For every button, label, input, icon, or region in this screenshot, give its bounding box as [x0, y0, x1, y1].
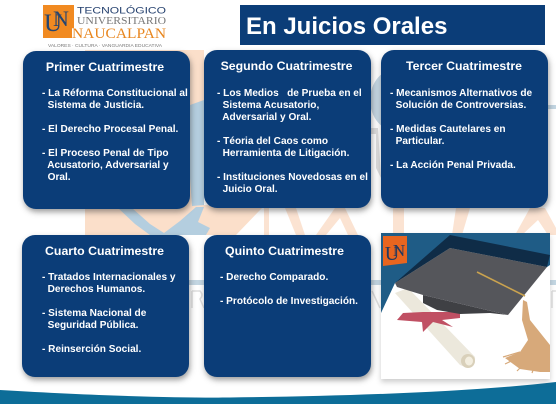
graduation cap and diploma image [381, 233, 550, 379]
icon: diploma scroll [395, 288, 475, 368]
panel: Segundo Cuatrimestre: Sistema Acusatorio, [223, 100, 319, 111]
panel: Cuarto Cuatrimestre: Seguridad Pública. [48, 320, 138, 331]
panel: Cuarto Cuatrimestre: - Tratados Internacionales y [42, 272, 176, 283]
panel: Quinto Cuatrimestre: Quinto Cuatrimestre [225, 244, 344, 258]
icon: logo badge [383, 236, 407, 266]
panel: Primer Cuatrimestre: Acusatorio, Adversarial y [47, 160, 169, 171]
panel: Primer Cuatrimestre: Primer Cuatrimestre [46, 60, 164, 74]
panel: Primer Cuatrimestre [23, 51, 190, 209]
icon: logo badge: N [393, 241, 405, 260]
panel: Segundo Cuatrimestre: Herramienta de Litigación. [223, 148, 349, 159]
logo emblem [43, 5, 74, 38]
panel: Tercer Cuatrimestre: Solución de Controversias. [396, 100, 526, 111]
icon: tassel [503, 300, 550, 373]
panel: Cuarto Cuatrimestre: Cuarto Cuatrimestre [45, 244, 164, 258]
logo wordmark [48, 6, 166, 48]
logo wordmark: NAUCALPAN [72, 26, 166, 42]
panel: Cuarto Cuatrimestre: - Reinserción Social. [42, 344, 141, 355]
logo [43, 5, 166, 48]
logo emblem: N [53, 6, 69, 31]
panel: Segundo Cuatrimestre [204, 50, 371, 208]
title: En Juicios Orales [246, 13, 447, 40]
panel: Tercer Cuatrimestre: - Medidas Cautelares en [390, 124, 506, 135]
panel: Segundo Cuatrimestre: Segundo Cuatrimestre [221, 59, 352, 73]
panel: Quinto Cuatrimestre: - Derecho Comparado. [220, 272, 328, 283]
panel: Cuarto Cuatrimestre: Derechos Humanos. [48, 284, 145, 295]
title [240, 5, 545, 45]
panel: Cuarto Cuatrimestre: - Sistema Nacional de [42, 308, 146, 319]
panel: Cuarto Cuatrimestre [22, 235, 189, 377]
panel: Quinto Cuatrimestre [204, 235, 371, 377]
panel: Segundo Cuatrimestre: Juicio Oral. [223, 184, 278, 195]
panel: Quinto Cuatrimestre: - Protócolo de Investigación. [220, 296, 358, 307]
icon: mortarboard cap [395, 235, 550, 315]
logo emblem: U [44, 10, 62, 37]
logo wordmark: UNIVERSITARIO [77, 15, 166, 27]
panel: Segundo Cuatrimestre: - Los Medios de Prueba en el [217, 88, 362, 99]
logo wordmark: VALORES · CULTURA · VANGUARDIA EDUCATIVA [48, 43, 163, 48]
panel: Tercer Cuatrimestre: - La Acción Penal Privada. [390, 160, 516, 171]
panel: Primer Cuatrimestre: - El Proceso Penal de Tipo [42, 148, 169, 159]
panel: Tercer Cuatrimestre: - Mecanismos Alternativos de [390, 88, 532, 99]
logo wordmark: TECNOLÓGICO [77, 6, 166, 16]
panel: Segundo Cuatrimestre: - Téoria del Caos como [217, 136, 328, 147]
panel: Tercer Cuatrimestre: Tercer Cuatrimestre [406, 59, 522, 73]
panel: Primer Cuatrimestre: - El Derecho Procesal Penal. [42, 124, 178, 135]
panel: Tercer Cuatrimestre [381, 50, 548, 208]
panel: Segundo Cuatrimestre: Adversarial y Oral. [222, 112, 311, 123]
panel: Tercer Cuatrimestre: Particular. [396, 136, 444, 147]
panel: Primer Cuatrimestre: - La Réforma Constitucional al [42, 88, 188, 99]
panel: Primer Cuatrimestre: Sistema de Justicia. [48, 100, 144, 111]
panel: Primer Cuatrimestre: Oral. [48, 172, 71, 183]
icon: logo badge: U [385, 243, 400, 265]
panel: Segundo Cuatrimestre: - Instituciones Novedosas en el [217, 172, 368, 183]
